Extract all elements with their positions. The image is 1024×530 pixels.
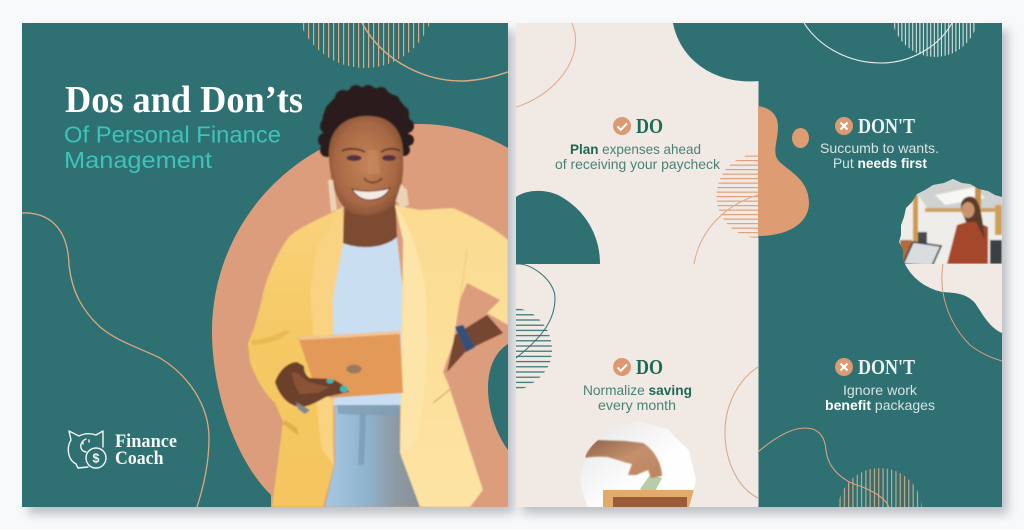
subtitle: Management [64,147,213,173]
tile: don't ignore [825,356,935,413]
horizontal hatch circle [716,154,758,238]
wrist tattoo [296,402,310,414]
icon: check [613,117,631,135]
icon: cross [835,358,853,376]
body text [825,383,935,413]
cream blob lower right tile [905,264,1002,333]
bill [640,475,662,497]
forearm on hip [447,315,503,372]
body text [583,383,692,413]
body text: Ignore work [843,383,917,398]
hand holding tablet [275,362,349,407]
body text: Put needs first [833,156,927,171]
earrings [328,180,409,212]
heading: DO [636,115,663,138]
hand [583,440,662,478]
peach curve over cream blob [942,264,1002,361]
panel: do and don't grid [516,0,1005,530]
logo: piggy bank icon [68,431,106,468]
teal arc lower left tile [516,264,555,358]
body text: Plan expenses ahead [570,142,701,157]
logo wordmark: Finance [115,431,177,452]
teal blob right edge [488,344,508,450]
nails [326,378,348,392]
vertical hatch half circle top right [894,23,977,57]
hair [318,85,414,161]
title: Dos and Don’ts [65,79,303,121]
white arc top right [804,23,952,63]
body text: of receiving your paycheck [555,157,720,172]
peach wavy curve bottom [758,428,889,507]
subtitle [64,122,281,173]
hatched half circle top [303,23,430,68]
arc top left [516,23,576,107]
person with tablet [248,85,508,507]
icon: cross [835,117,853,135]
wooden box [603,490,694,508]
tile: do plan [555,115,720,172]
body text [820,141,939,171]
subtitle: Of Personal Finance [64,122,281,148]
body text: every month [598,398,676,413]
tile: do save [583,356,692,413]
face [329,116,403,215]
heading: DO [636,356,663,379]
peach curve centre [725,367,758,498]
eyebrows and eyes [342,149,400,161]
peach backdrop shape [212,124,508,507]
jacket right side [395,205,508,507]
body text: Normalize saving [583,383,692,398]
arc line top right [362,23,508,81]
heading: DON'T [858,356,915,379]
body text: Succumb to wants. [820,141,939,156]
arc crossing hatch [694,195,758,264]
peach blob [758,106,809,236]
nose [364,178,382,182]
photo: woman at register [895,175,1005,267]
teal blob top [673,23,759,81]
teal blob lower left of first tile [516,191,600,264]
logo wordmark: Coach [115,448,164,469]
body text: benefit packages [825,398,935,413]
heading: DON'T [858,115,915,138]
body text [555,142,720,172]
jacket left side [248,207,343,507]
smile [352,188,390,200]
panel: cover [22,0,508,507]
neck [343,195,397,247]
horizontal hatch circle lower left [516,307,552,392]
watch [455,325,475,352]
logo wordmark [115,434,177,464]
icon: check [613,358,631,376]
tablet [298,331,403,398]
vertical hatch half circle bottom [838,468,922,530]
tile: don't succumb [820,115,939,171]
wavy line left [22,213,209,507]
top [333,237,404,405]
jeans [325,398,421,507]
logo: piggy bank icon: $ [93,452,100,466]
peach dot [792,128,809,148]
photo: hand dropping money in box [575,415,700,510]
